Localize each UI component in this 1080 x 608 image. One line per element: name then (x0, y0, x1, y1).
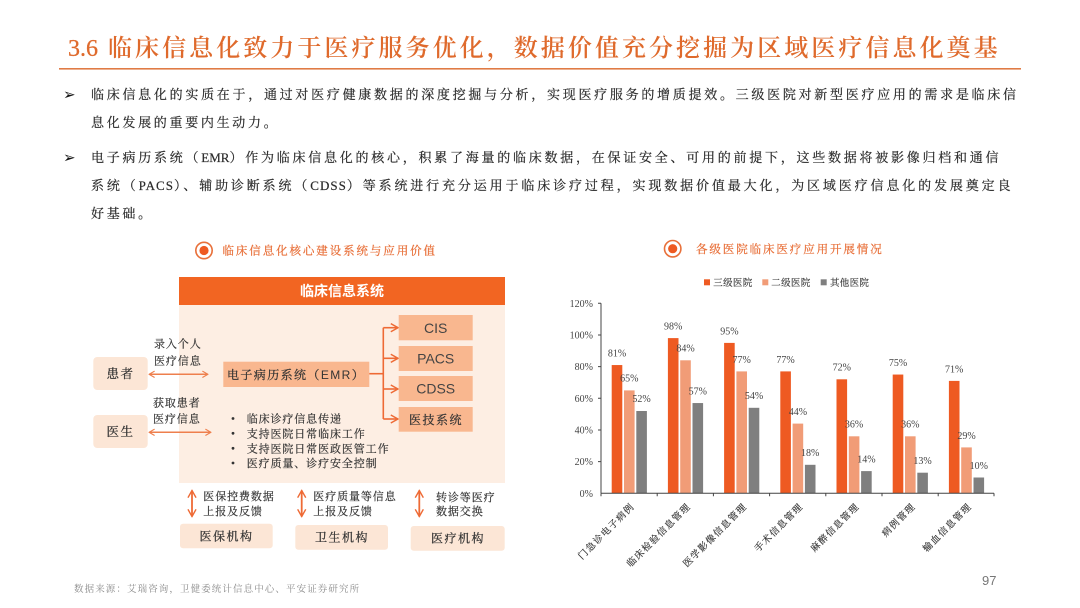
data labels: 65% (620, 374, 638, 384)
data labels: 29% (957, 431, 976, 442)
heading: left diagram: 临床信息化核心建设系统与应用价值 (222, 244, 437, 258)
data labels: 71% (945, 364, 963, 375)
bullet one text (63, 87, 1016, 130)
data labels: 10% (970, 461, 988, 472)
y axis: 40% (575, 426, 593, 436)
box: patient (93, 357, 148, 390)
icon: target bullet right (664, 240, 681, 257)
box: CIS: CIS (424, 320, 447, 336)
box: medical institution (411, 526, 505, 551)
bullet one text: 临床信息化的实质在于，通过对医疗健康数据的深度挖掘与分析，实现医疗服务的增质提效。三级医院对新型医疗应用的需求是临床信 (91, 87, 1016, 103)
bullet list of functions: 临床诊疗信息传递 (247, 412, 342, 426)
data labels (608, 322, 988, 472)
box: PACS: PACS (417, 350, 454, 366)
box: health agency (295, 525, 388, 550)
exchange: health agency (302, 489, 397, 518)
doctor arrow and label: 医疗信息 (153, 412, 201, 426)
chart legend (704, 277, 869, 289)
data labels: 52% (632, 394, 651, 405)
exchange: medical institution: 数据交换 (436, 504, 484, 518)
y axis: 20% (575, 457, 593, 468)
bullet two text: 电子病历系统（EMR）作为临床信息化的核心，积累了海量的临床数据，在保证安全、可用的前提下，这些数据将被影像归档和通信 (91, 150, 1001, 166)
EMR box: 电子病历系统（EMR） (227, 367, 365, 382)
bullet two text (63, 150, 1013, 221)
system header (179, 277, 505, 305)
chart legend: 三级医院 (713, 277, 753, 289)
bullet one text: 息化发展的重要内生动力。 (91, 115, 279, 130)
series: secondary hospitals (624, 360, 972, 493)
box: medical technology system: 医技系统 (409, 412, 463, 427)
data labels: 77% (733, 355, 751, 366)
series: tertiary hospitals (612, 338, 960, 493)
title: 3.6 (68, 36, 98, 62)
data labels: 44% (789, 407, 807, 418)
data labels: 75% (889, 358, 907, 369)
data labels: 13% (913, 456, 932, 467)
bullet list of functions (232, 412, 390, 470)
category labels (576, 501, 974, 570)
title: 临床信息化致力于医疗服务优化，数据价值充分挖掘为区域医疗信息化奠基 (108, 35, 1001, 62)
box: medical institution: 医疗机构 (431, 530, 485, 546)
data labels: 36% (845, 420, 863, 431)
box: medical technology system (399, 407, 473, 432)
box: medical insurance agency (180, 524, 273, 548)
heading: right chart (664, 240, 884, 257)
y axis: 100% (570, 330, 593, 342)
y axis: 60% (575, 394, 593, 405)
bullet one text: ➢ (63, 88, 76, 104)
box: patient: 患者 (106, 366, 135, 381)
box: PACS (399, 346, 473, 371)
box: CDSS: CDSS (416, 380, 455, 396)
bullet two text: 好基础。 (91, 206, 154, 221)
doctor arrow and label (149, 396, 211, 432)
box: health agency: 卫生机构 (315, 530, 369, 544)
data labels: 84% (676, 344, 695, 354)
patient arrow and label: 医疗信息 (154, 354, 202, 368)
box: doctor (93, 415, 148, 448)
y axis: 0% (580, 489, 593, 500)
data labels: 54% (745, 391, 763, 402)
doctor arrow and label: 获取患者 (153, 396, 201, 410)
y axis (570, 299, 601, 500)
data labels: 18% (801, 448, 819, 459)
series: other hospitals (636, 403, 984, 493)
category labels: 门急诊电子病例 (576, 501, 637, 562)
x axis (601, 493, 994, 496)
category labels: 医学影像信息管理 (681, 501, 750, 570)
y axis: 120% (570, 299, 593, 310)
icon: target bullet left (196, 242, 212, 259)
EMR branch arrows (369, 328, 398, 419)
category labels: 病例管理 (879, 501, 918, 539)
category labels: 手术信息管理 (752, 501, 806, 555)
box: CIS (399, 315, 473, 340)
data labels: 95% (720, 326, 739, 337)
bullet list of functions: 支持医院日常临床工作 (247, 426, 366, 440)
patient arrow and label (149, 336, 208, 374)
data labels: 77% (776, 355, 795, 366)
bullet text block (63, 87, 1016, 221)
exchange: health agency: 上报及反馈 (313, 504, 373, 518)
bullet list of functions: 医疗质量、诊疗安全控制 (247, 456, 378, 470)
bullet two text: ➢ (63, 150, 76, 166)
y axis: 80% (575, 362, 593, 373)
chart legend: 其他医院 (830, 277, 869, 289)
data labels: 14% (857, 454, 876, 466)
system body panel (179, 305, 505, 483)
bullet list of functions: 支持医院日常医政医管工作 (247, 442, 390, 456)
data labels: 81% (608, 348, 626, 360)
chart legend: 二级医院 (771, 277, 811, 289)
bullet two text: 系统（PACS）、辅助诊断系统（CDSS）等系统进行充分运用于临床诊疗过程，实现数据价值最大化，为区域医疗信息化的发展奠定良 (91, 178, 1013, 194)
bar chart (570, 299, 994, 570)
category labels: 输血信息管理 (920, 501, 974, 555)
heading: right chart: 各级医院临床医疗应用开展情况 (696, 242, 884, 256)
exchange: medical insurance (192, 489, 275, 518)
data labels: 98% (664, 322, 682, 332)
patient arrow and label: 录入个人 (154, 336, 202, 350)
data labels: 72% (833, 363, 851, 374)
exchange: health agency: 医疗质量等信息 (313, 489, 397, 503)
box: doctor: 医生 (106, 424, 135, 439)
panel: clinical information system diagram (93, 277, 505, 551)
heading: left diagram (196, 242, 437, 259)
system header: 临床信息系统 (300, 283, 384, 299)
box: medical insurance agency: 医保机构 (199, 528, 254, 544)
exchange: medical insurance: 医保控费数据 (203, 489, 275, 503)
data labels: 57% (689, 386, 707, 398)
source note: 数据来源：艾瑞咨询，卫健委统计信息中心、平安证券研究所 (74, 583, 360, 595)
exchange: medical insurance: 上报及反馈 (203, 504, 263, 518)
exchange: medical institution (419, 490, 496, 518)
category labels: 麻醉信息管理 (808, 501, 862, 555)
data labels: 36% (901, 420, 919, 431)
exchange: medical institution: 转诊等医疗 (436, 490, 496, 504)
page number: 97 (982, 573, 996, 588)
category labels: 临床检验信息管理 (624, 501, 693, 570)
EMR box (223, 362, 369, 387)
box: CDSS (399, 376, 473, 401)
title underline (59, 68, 1021, 70)
